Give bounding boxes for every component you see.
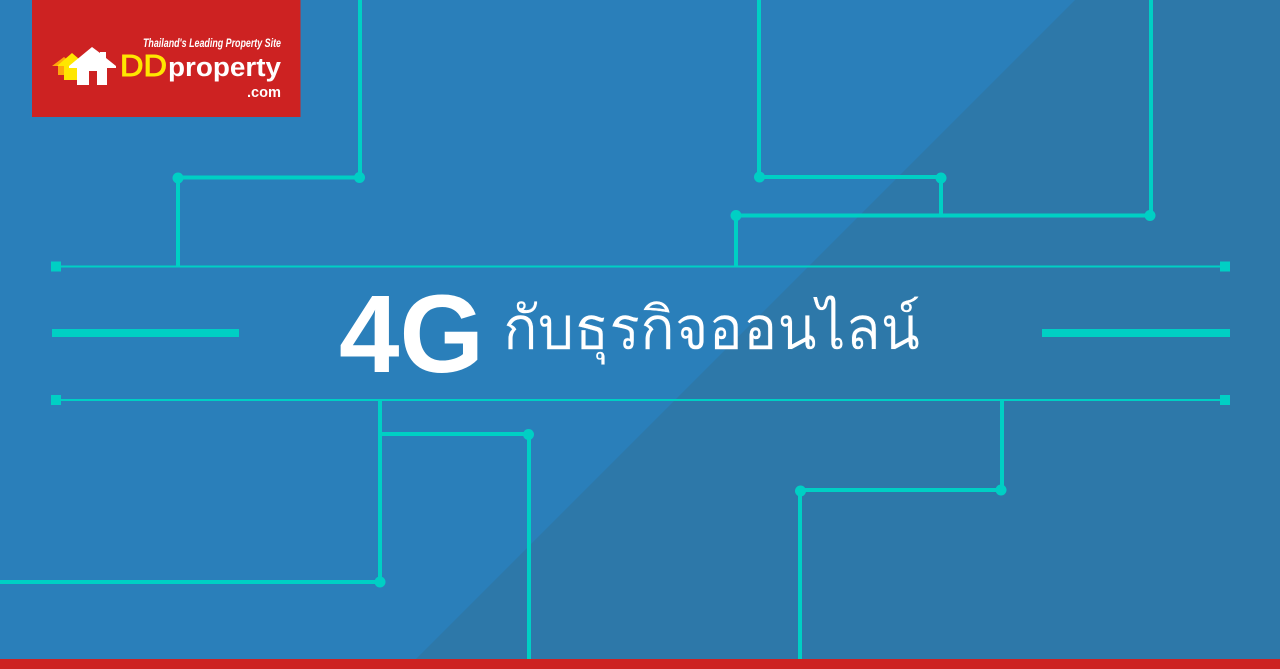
logo panel	[32, 0, 300, 117]
circuit lines: bottom right	[795, 400, 1006, 659]
circuit lines: bottom left	[0, 400, 534, 659]
logo panel: property	[168, 54, 282, 82]
logo wordmark: DD	[120, 48, 167, 83]
lower horizontal rule with square ends	[51, 395, 1230, 405]
diagonal darker background band	[406, 0, 1280, 669]
logo domain: .com	[247, 84, 281, 101]
logo tagline: Thailand's Leading Property Site	[143, 38, 281, 50]
upper horizontal rule with square ends	[51, 262, 1230, 272]
title: 4G	[339, 273, 484, 396]
title	[339, 273, 920, 396]
bottom red bar	[0, 659, 1280, 669]
circuit lines: top right	[730, 0, 1156, 266]
circuit lines: top left	[172, 0, 365, 266]
title: กับธุรกิจออนไลน์	[503, 294, 920, 365]
left title dash	[52, 329, 239, 337]
icon: houses	[52, 47, 116, 85]
right title dash	[1042, 329, 1230, 337]
